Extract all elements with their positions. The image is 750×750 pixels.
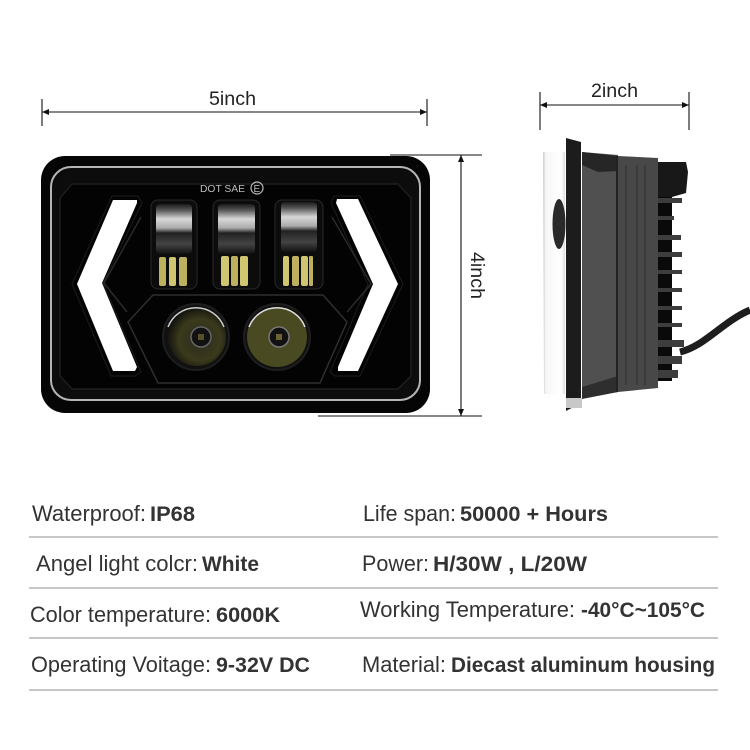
spec: power	[362, 551, 588, 576]
spec: material	[362, 652, 715, 677]
spec: material: Material:	[362, 652, 446, 677]
spec: life span: 50000 + Hours	[460, 502, 608, 526]
left white chevron	[77, 200, 137, 371]
heat sink fins	[658, 162, 688, 381]
cable	[680, 310, 750, 352]
spec: operating voltage: Operating Voitage:	[31, 652, 211, 677]
spec: waterproof: Waterproof:	[32, 501, 146, 526]
spec: color temperature: 6000K	[216, 603, 280, 627]
front body	[582, 152, 618, 397]
spec: life span: Life span:	[363, 501, 456, 526]
low beam lenses	[163, 304, 310, 370]
spec: power: Power:	[362, 551, 429, 576]
spec: waterproof: IP68	[150, 502, 195, 526]
front view of headlight	[41, 156, 430, 413]
spec table	[29, 501, 718, 690]
right chevron outline	[330, 196, 403, 376]
spec: color temperature: Color temperature:	[30, 602, 211, 627]
spec: angel light color: White	[202, 552, 259, 576]
row dividers	[29, 537, 718, 690]
height dimension: 4inch: 4inch	[466, 252, 487, 299]
low beam panel	[128, 295, 347, 383]
height dimension: 4inch	[318, 155, 487, 416]
flange	[566, 138, 581, 411]
width dimension: 5inch: 5inch	[209, 89, 256, 110]
spec: working temperature	[360, 597, 705, 622]
DOT SAE mark: E	[254, 184, 260, 195]
spec: operating voltage: 9-32V DC	[216, 653, 310, 677]
chevron inner lines	[104, 217, 371, 312]
spec: material: Diecast aluminum housing	[451, 653, 715, 677]
right white chevron	[336, 199, 398, 371]
spec: life span	[363, 501, 608, 526]
inner bezel	[60, 184, 411, 389]
spec: waterproof	[32, 501, 195, 526]
DOT SAE mark	[200, 182, 263, 195]
spec: angel light color: Angel light colcr:	[36, 551, 198, 576]
high beam lamp modules	[151, 200, 323, 289]
width dimension: 2inch: 2inch	[591, 81, 638, 102]
width dimension: 5inch	[42, 89, 427, 126]
width dimension: 2inch	[540, 81, 689, 130]
halo ring	[51, 167, 420, 400]
left chevron outline	[72, 196, 142, 376]
spec: working temperature: Working Temperature:	[360, 597, 575, 622]
spec: operating voltage	[31, 652, 310, 677]
side view of headlight	[543, 138, 750, 411]
rear body	[618, 156, 658, 392]
housing	[41, 156, 430, 413]
DOT SAE mark: DOT SAE	[200, 183, 245, 195]
spec: working temperature: -40°C~105°C	[581, 598, 705, 622]
lens	[543, 152, 565, 394]
spec: power: H/30W , L/20W	[433, 552, 588, 576]
